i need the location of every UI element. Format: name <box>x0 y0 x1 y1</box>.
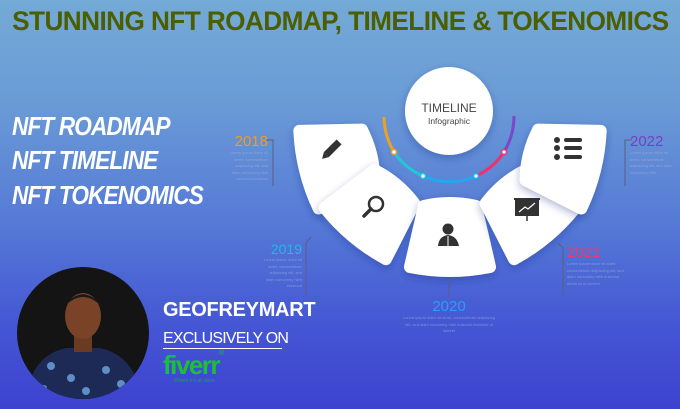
label 2018: Lorem ipsum dolor sit amet, consectetuer adipiscing elit, sed diam nonummy nibh euismod tincidunt <box>230 150 268 181</box>
fiverr logo: fiverr® <box>163 350 224 380</box>
center circle: TIMELINE <box>421 101 477 115</box>
center circle <box>405 67 493 155</box>
label 2019: 2019 <box>271 241 302 257</box>
left list: NFT TOKENOMICS: NFT TOKENOMICS <box>12 180 203 210</box>
left list: NFT TIMELINE: NFT TIMELINE <box>12 145 157 175</box>
label 2022: 2022 <box>630 133 663 150</box>
card 2018 <box>295 115 381 209</box>
card 2020 <box>410 203 490 271</box>
icon: chart board <box>514 198 540 221</box>
label 2021 <box>567 244 624 286</box>
photo portrait <box>17 267 149 399</box>
fiverr logo: Where it's all done <box>174 378 215 384</box>
label 2020: Lorem ipsum dolor sit amet, consectetuer adipiscing elit, sed diam nonummy nibh euismod tincidunt ut laoreet <box>403 315 495 333</box>
icon: person <box>438 224 459 246</box>
center circle: Infographic <box>428 116 471 126</box>
label 2020 <box>403 298 495 333</box>
label 2019 <box>264 241 302 288</box>
label 2021: Lorem ipsum dolor sit amet, consectetuer adipiscing elit, sed diam nonummy nibh euismod tincidunt ut laoreet <box>567 261 624 286</box>
title: STUNNING NFT ROADMAP, TIMELINE & TOKENOMICS <box>12 6 668 36</box>
icon: pencil <box>320 139 342 161</box>
label 2022 <box>630 133 672 175</box>
brackets <box>266 140 632 297</box>
exclusively on: EXCLUSIVELY ON <box>163 330 288 347</box>
icon: magnifier <box>364 197 383 216</box>
card 2022 <box>519 115 605 209</box>
label 2018: 2018 <box>235 133 268 150</box>
colored arc <box>384 116 514 182</box>
card 2019 <box>322 159 427 262</box>
label 2018 <box>230 133 268 181</box>
icon: list <box>554 137 582 160</box>
label 2021: 2021 <box>567 244 600 261</box>
label 2019: Lorem ipsum dolor sit amet, consectetuer adipiscing elit, sed diam nonummy nibh euismod <box>264 257 302 288</box>
label 2022: Lorem ipsum dolor sit amet, consectetuer adipiscing elit, sed diam nonummy nibh <box>630 150 672 174</box>
label 2020: 2020 <box>432 298 466 315</box>
card 2021 <box>473 159 578 262</box>
author name: GEOFREYMART <box>163 299 315 321</box>
left list: NFT ROADMAP: NFT ROADMAP <box>12 111 170 141</box>
